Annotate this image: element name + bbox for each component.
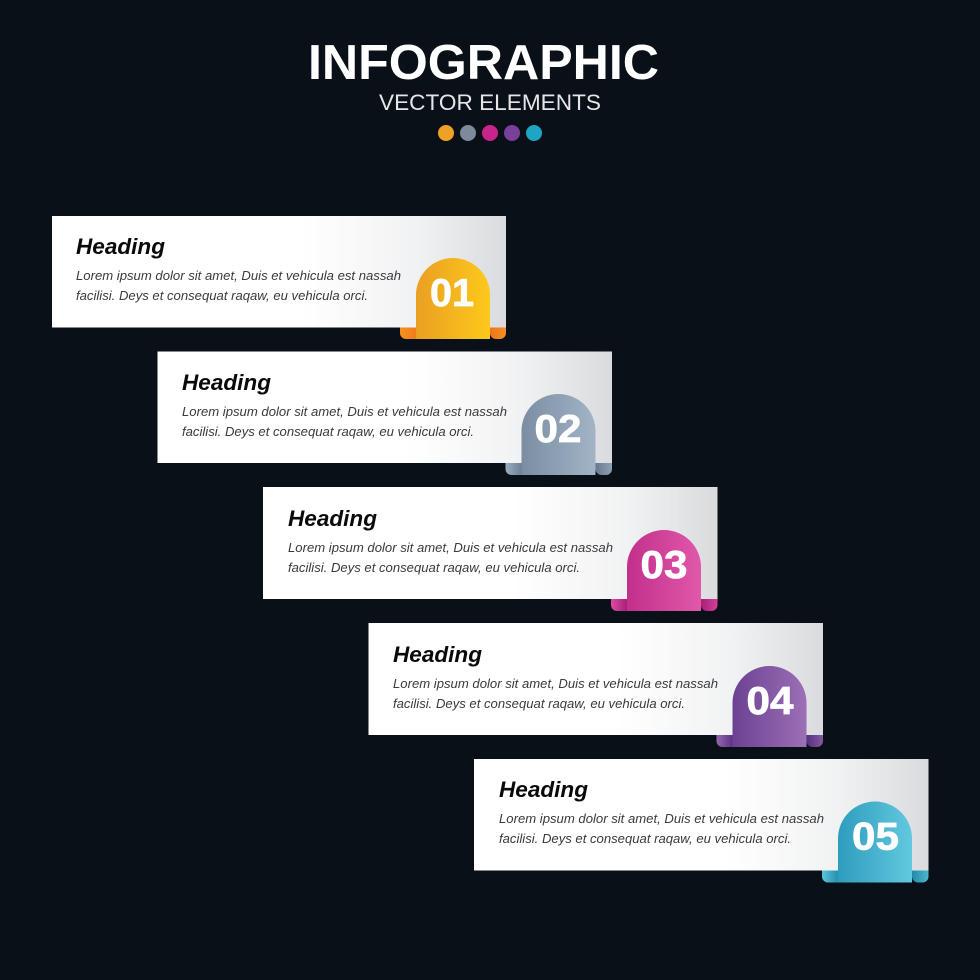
number badge 03: 03 (640, 544, 688, 587)
panel: step 04 (368, 623, 823, 747)
number badge 05: 05 (852, 816, 899, 858)
body text 05: facilisi. Deys et consequat raqaw, eu vehicula orci. (499, 831, 791, 846)
body text 01 (76, 268, 401, 303)
body text 04 (393, 676, 718, 711)
ribbon tab 05 (822, 870, 928, 882)
heading 04: Heading (393, 642, 483, 667)
number badge 04 (732, 666, 806, 747)
ribbon tab 04 (716, 735, 823, 747)
body text 04: Lorem ipsum dolor sit amet, Duis et vehicula est nassah (393, 676, 718, 691)
body text 01: Lorem ipsum dolor sit amet, Duis et vehicula est nassah (76, 268, 401, 283)
number badge 02: 02 (534, 408, 582, 451)
ribbon tab 02 (506, 463, 612, 475)
subtitle: VECTOR ELEMENTS (379, 90, 601, 115)
heading 01: Heading (76, 234, 166, 259)
heading 02: Heading (182, 370, 272, 395)
panel: step 02 (158, 352, 612, 475)
number badge 03 (627, 530, 701, 611)
heading 05: Heading (499, 777, 589, 802)
body text 04: facilisi. Deys et consequat raqaw, eu vehicula orci. (393, 696, 685, 711)
body text 03: Lorem ipsum dolor sit amet, Duis et vehicula est nassah (288, 540, 613, 555)
number badge 01: 01 (430, 272, 474, 315)
body text 01: facilisi. Deys et consequat raqaw, eu vehicula orci. (76, 288, 368, 303)
body text 02: Lorem ipsum dolor sit amet, Duis et vehicula est nassah (182, 404, 507, 419)
number badge 02 (522, 394, 596, 475)
body text 03: facilisi. Deys et consequat raqaw, eu vehicula orci. (288, 560, 580, 575)
number badge 01 (416, 258, 490, 339)
ribbon tab 03 (611, 599, 718, 611)
body text 05 (499, 811, 824, 846)
body text 05: Lorem ipsum dolor sit amet, Duis et vehicula est nassah (499, 811, 824, 826)
title: INFOGRAPHIC (308, 36, 659, 90)
number badge 05 (838, 802, 912, 882)
number badge 04: 04 (746, 680, 794, 723)
panel: step 03 (263, 487, 718, 611)
ribbon tab 01 (400, 328, 506, 339)
heading 03: Heading (288, 506, 378, 531)
body text 03 (288, 540, 613, 575)
body text 02 (182, 404, 507, 439)
panel: step 01 (52, 216, 506, 339)
body text 02: facilisi. Deys et consequat raqaw, eu vehicula orci. (182, 424, 474, 439)
colour dots (438, 125, 542, 141)
panel: step 05 (474, 759, 928, 882)
